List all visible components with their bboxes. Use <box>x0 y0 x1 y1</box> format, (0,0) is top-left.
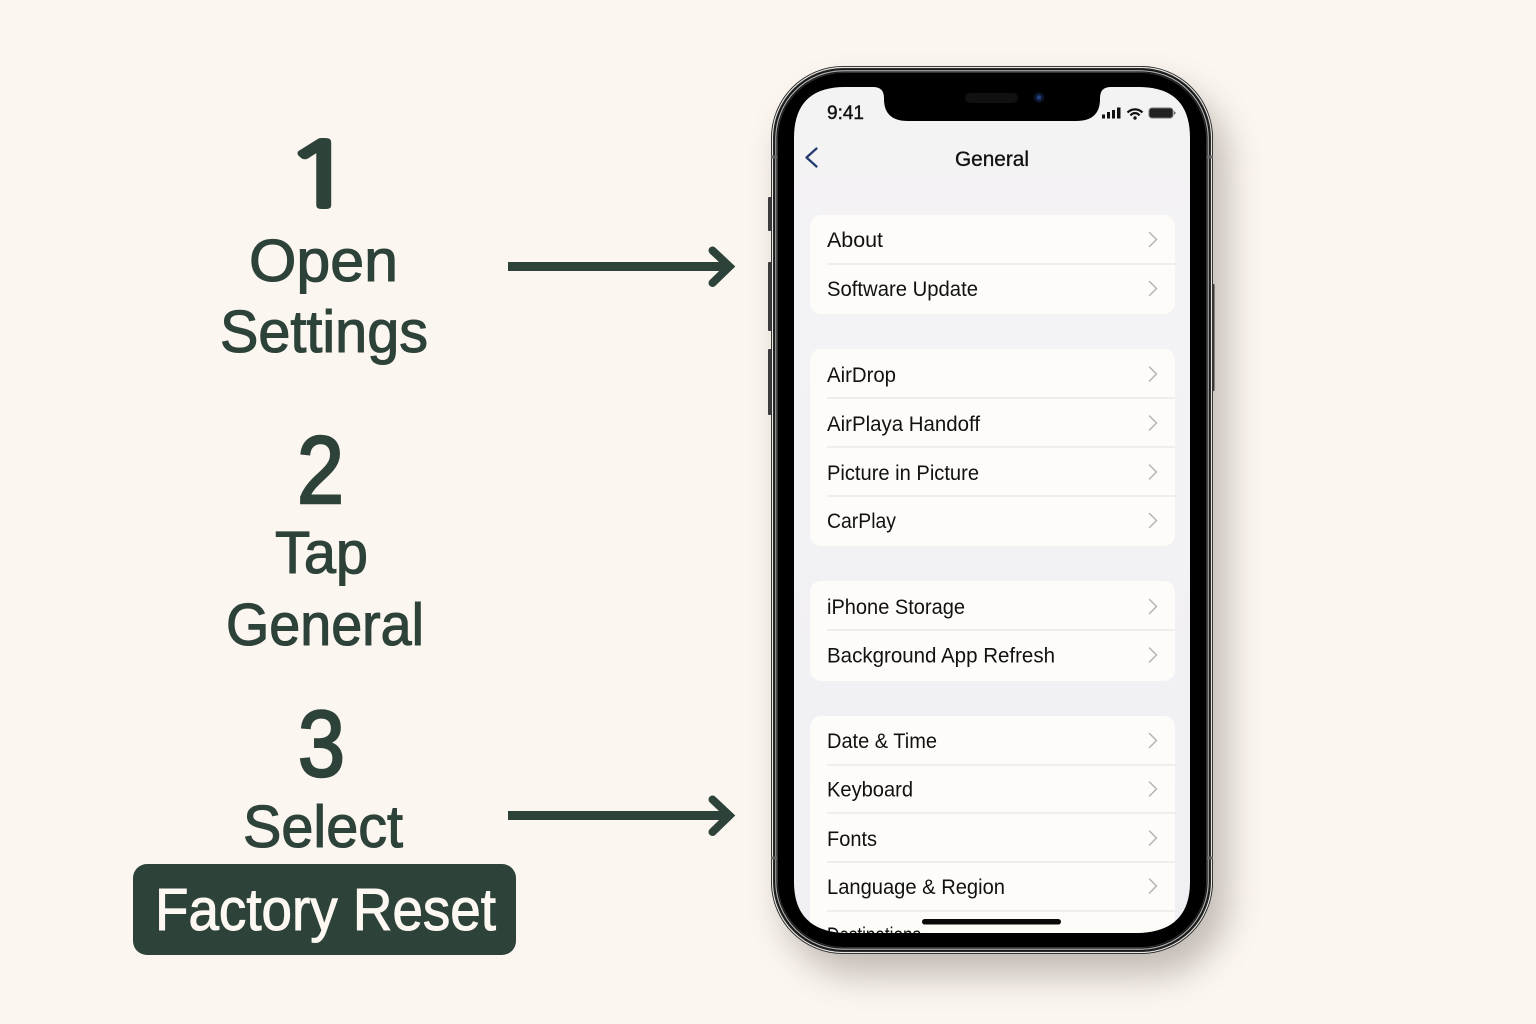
step 3: select factory reset: 3 <box>298 691 345 796</box>
settings group 4: Language & Region <box>827 876 1005 899</box>
screen title: General <box>955 148 1029 171</box>
status bar time: 9:41 <box>827 103 864 124</box>
notch speaker and camera <box>965 92 1044 103</box>
step 1: open settings: 1 <box>284 131 356 219</box>
side buttons <box>768 197 1214 415</box>
settings group 1: Software Update <box>827 278 978 301</box>
arrow: step 3 to phone <box>508 800 730 832</box>
settings group 2: Picture in Picture <box>827 462 979 485</box>
step 3: select factory reset: Factory Reset <box>155 877 496 943</box>
settings group 4: Date & Time <box>827 730 937 753</box>
step 2: tap general <box>226 417 424 658</box>
phone <box>768 66 1228 976</box>
settings group 2: AirDrop <box>827 364 896 387</box>
status bar icons <box>1102 108 1176 120</box>
step 2: tap general: 2 <box>297 417 344 524</box>
settings group 2: AirPlaya Handoff <box>827 413 980 436</box>
settings group 3: Background App Refresh <box>827 644 1055 668</box>
settings group 1: About <box>827 229 883 252</box>
phone frame <box>771 66 1213 954</box>
arrow: step 1 to phone <box>508 250 730 283</box>
step 3: select factory reset: Select <box>243 794 403 860</box>
step 2: tap general: Tap <box>275 520 368 586</box>
settings group 2 <box>810 349 1175 546</box>
settings group 2: CarPlay <box>827 510 896 533</box>
settings group 1 <box>810 215 1175 314</box>
step 3: select factory reset <box>133 691 516 955</box>
settings group 4: Keyboard <box>827 778 913 802</box>
step 1: open settings: Settings <box>220 299 428 365</box>
settings group 4: Destinations <box>827 924 921 947</box>
step 2: tap general: General <box>226 592 424 658</box>
settings group 3: iPhone Storage <box>827 596 965 619</box>
step 1: open settings: Open <box>249 228 398 294</box>
step 1: open settings <box>220 131 428 365</box>
settings group 3 <box>810 581 1175 681</box>
settings group 4 <box>810 716 1175 956</box>
screen <box>794 87 1190 956</box>
back chevron <box>806 148 816 166</box>
settings group 4: Fonts <box>827 828 877 851</box>
home indicator <box>922 919 1061 924</box>
